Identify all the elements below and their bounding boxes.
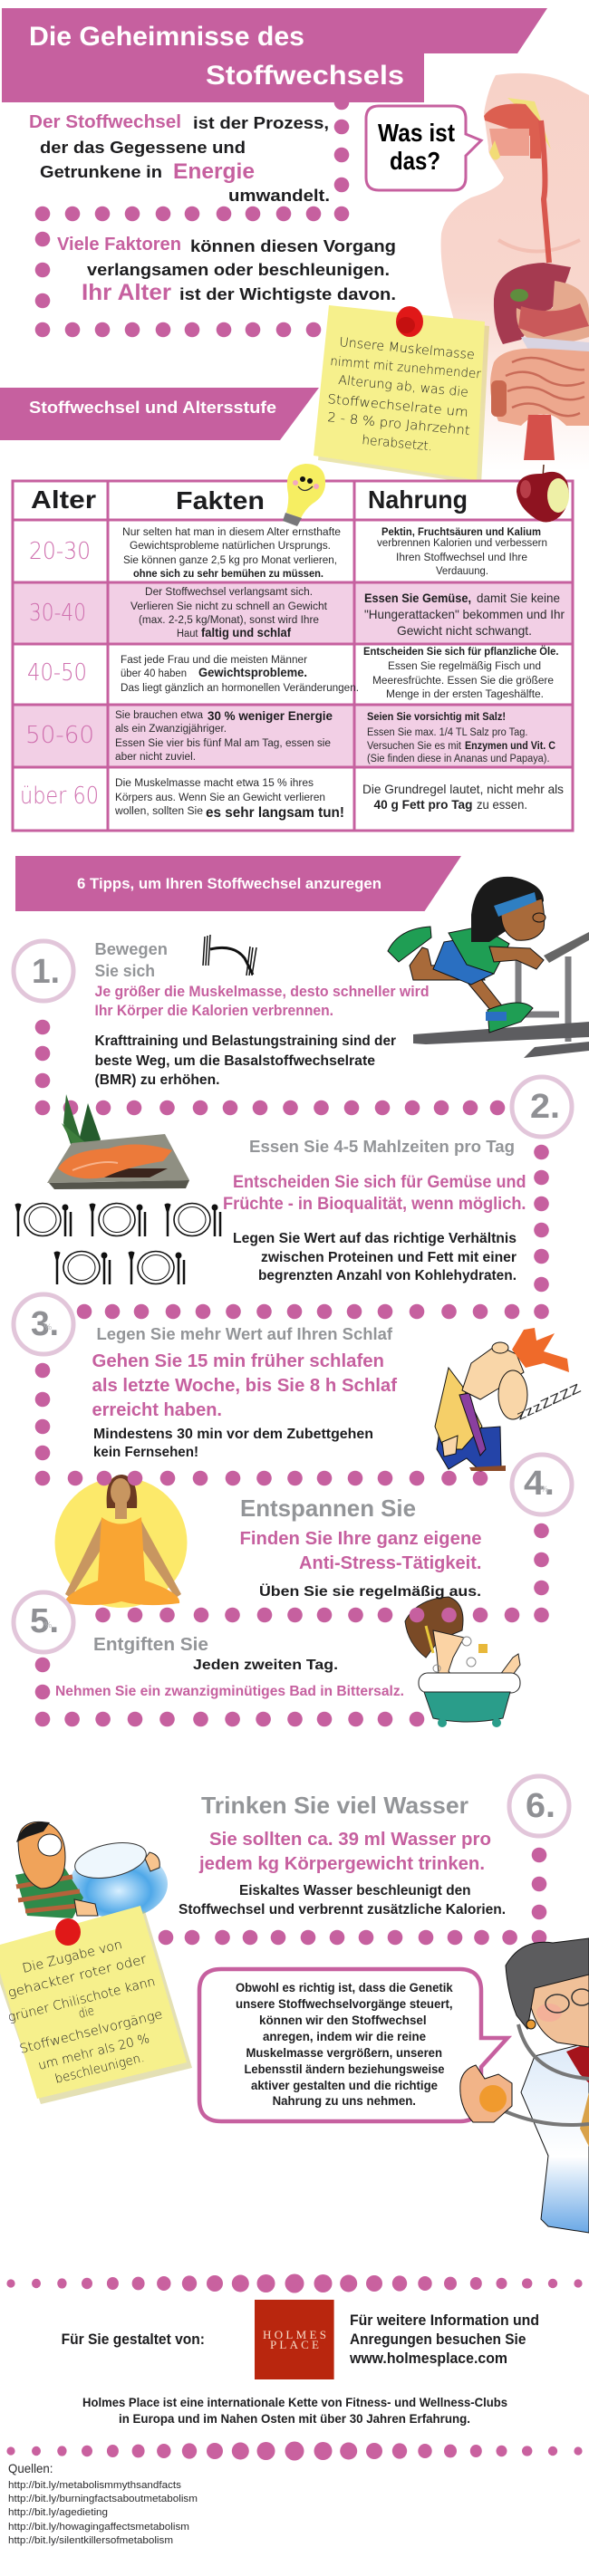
section banner: Stoffwechsel und Altersstufe — [0, 388, 319, 440]
tip 1 number badge: 1. — [32, 953, 60, 991]
title banner — [2, 8, 547, 102]
sources list: Quellen: — [8, 2461, 53, 2475]
tip 6 text — [179, 1792, 506, 1918]
tip 2 text — [223, 1138, 526, 1283]
sticky note: Muskelmasse: 2 - 8 % pro Jahrzehnt — [327, 410, 470, 438]
intro text: definition: Getrunkene in — [40, 163, 162, 181]
table row: 20-30: Nur selten hat man in diesem Alter ernsthafte — [122, 527, 341, 538]
table row: 40-50: Entscheiden Sie sich für pflanzliche Öle. — [363, 646, 558, 658]
tip 3 number badge: 3. — [31, 1305, 59, 1343]
tip 6 text: jedem kg Körpergewicht trinken. — [198, 1854, 485, 1874]
table row: 50-60: 30 % weniger Energie — [208, 708, 333, 723]
illustration: woman in bath — [405, 1597, 520, 1727]
tip 2 text: Entscheiden Sie sich für Gemüse und — [233, 1173, 526, 1192]
table row: 50-60: 50-60 — [25, 722, 94, 749]
table row: 50-60: Essen Sie vier bis fünf Mal am Tag, essen sie — [115, 738, 331, 749]
table row: 40-50: Fast jede Frau und die meisten Männer — [121, 655, 307, 666]
sticky note: Chilischote: beschleunigen. — [53, 2051, 146, 2087]
table row: 50-60: Enzymen und Vit. C — [465, 741, 555, 752]
tip 1 text: Krafttraining und Belastungstraining sind der — [94, 1033, 396, 1049]
credit: more information: www.holmesplace.com — [349, 2350, 507, 2367]
tip 1 text: Ihr Körper die Kalorien verbrennen. — [94, 1002, 333, 1019]
table row: 30-40: 30-40 — [29, 600, 86, 627]
table header row: Alter — [31, 485, 96, 514]
tip 6 text: Sie sollten ca. 39 ml Wasser pro — [209, 1830, 491, 1850]
table row: 40-50: Gewichtsprobleme. — [198, 665, 307, 679]
icon: bitten apple — [517, 465, 569, 523]
section banner: Stoffwechsel und Altersstufe: Stoffwechsel und Altersstufe — [29, 399, 276, 417]
table row: 40-50: Menge in der ersten Tageshälfte. — [386, 689, 544, 700]
intro text: factors — [57, 235, 396, 305]
logo: Holmes Place: HOLMES — [263, 2328, 326, 2341]
sticky note: Muskelmasse: nimmt mit zunehmender — [330, 354, 482, 382]
title banner: Die Geheimnisse des — [29, 22, 304, 52]
tip 4 number badge — [512, 1455, 572, 1514]
speech bubble: Was ist das?: das? — [390, 147, 440, 175]
sticky note: Chilischote: gehackter roter oder — [6, 1952, 149, 2001]
table row: 30-40: "Hungerattacken" bekommen und Ihr — [364, 607, 565, 621]
intro text: definition: Der Stoffwechsel — [29, 112, 181, 132]
tip 1 text: Bewegen — [94, 940, 168, 958]
dotted divider: top — [6, 2273, 583, 2293]
company description: in Europa und im Nahen Osten mit über 30 Jahren Erfahrung. — [119, 2411, 470, 2426]
sticky note: Muskelmasse: Unsere Muskelmasse — [339, 335, 475, 362]
sources list — [8, 2461, 198, 2546]
tip 5 text: Nehmen Sie ein zwanzigminütiges Bad in Bittersalz. — [55, 1684, 404, 1699]
tip 4 text — [239, 1495, 482, 1600]
tip 5 number badge: % — [44, 1620, 52, 1629]
table row: 30-40: faltig und schlaf — [201, 625, 291, 639]
dotted frame: intro — [35, 95, 349, 337]
tip 3 text — [92, 1325, 397, 1460]
tip 3 text: erreicht haben. — [92, 1400, 222, 1420]
sticky note: Muskelmasse: Alterung ab, was die — [338, 373, 468, 400]
table row: über 60: zu essen. — [477, 797, 527, 812]
table row: über 60: es sehr langsam tun! — [206, 805, 344, 821]
tip 4 text: Üben Sie sie regelmäßig aus. — [259, 1582, 481, 1600]
company description: Holmes Place ist eine internationale Kette von Fitness- und Wellness-Clubs — [82, 2395, 507, 2409]
table row: 20-30: Verdauung. — [436, 566, 488, 577]
sticky note: Chilischote — [0, 1906, 192, 2104]
tip 3 text: als letzte Woche, bis Sie 8 h Schlaf — [92, 1376, 397, 1396]
illustration: doctor with stethoscope — [460, 1938, 589, 2233]
intro text: factors: können diesen Vorgang — [190, 237, 396, 255]
tip 1 text: (BMR) zu erhöhen. — [94, 1072, 219, 1088]
tip 6 number badge — [509, 1776, 569, 1836]
intro text: definition: umwandelt. — [228, 187, 330, 205]
table row: 20-30: ohne sich zu sehr bemühen zu müssen. — [133, 569, 323, 580]
illustration: salmon on plate — [47, 1094, 189, 1189]
speech bubble: Genetik: Muskelmasse vergrößern, unseren — [246, 2045, 442, 2060]
illustration: human anatomy — [441, 73, 589, 471]
speech bubble: Genetik: Obwohl es richtig ist, dass die Genetik — [236, 1980, 453, 1994]
table row: 30-40: Der Stoffwechsel verlangsamt sich. — [145, 587, 313, 598]
table: Alter, Fakten, Nahrung — [13, 481, 573, 831]
tip 1 text: Je größer die Muskelmasse, desto schneller wird — [94, 983, 430, 1000]
sticky note: Muskelmasse: Stoffwechselrate um — [327, 392, 468, 420]
table row: 50-60: Sie brauchen etwa — [115, 710, 204, 721]
tip 2 text: Essen Sie 4-5 Mahlzeiten pro Tag — [249, 1138, 515, 1156]
section banner: 6 Tipps — [15, 856, 461, 911]
tip 2 number badge: 2. — [530, 1088, 560, 1126]
tip 3 text: Gehen Sie 15 min früher schlafen — [92, 1351, 384, 1371]
table row: 20-30: verbrennen Kalorien und verbessern — [377, 538, 547, 549]
table row: über 60 — [20, 778, 564, 821]
dotted path: tips 2 to 5 — [35, 1145, 549, 1726]
icon: smiling light bulb — [283, 464, 325, 526]
table row: über 60: über 60 — [20, 783, 99, 810]
table row: 20-30: Ihren Stoffwechsel und Ihre — [396, 553, 527, 563]
tip 2 text: zwischen Proteinen und Fett mit einer — [261, 1250, 517, 1265]
tip 3 number badge: % — [44, 1322, 52, 1331]
tip 1 number badge — [14, 941, 73, 1001]
tip 3 text: Mindestens 30 min vor dem Zubettgehen — [93, 1427, 373, 1442]
table row: 50-60: Seien Sie vorsichtig mit Salz! — [367, 712, 506, 723]
company description — [82, 2395, 507, 2426]
credit: more information: Für weitere Information und — [350, 2312, 539, 2329]
table row: 30-40: Verlieren Sie nicht zu schnell an Gewicht — [130, 601, 328, 612]
table row: 40-50: Das liegt gänzlich an hormonellen Veränderungen. — [121, 683, 359, 694]
table row: 50-60: aber nicht zuviel. — [115, 752, 196, 763]
speech bubble: Genetik: Lebensstil ändern beziehungsweise — [245, 2062, 445, 2076]
table row: über 60: Die Grundregel lautet, nicht mehr als — [362, 782, 564, 796]
tip 6 text: Eiskaltes Wasser beschleunigt den — [239, 1883, 471, 1898]
speech bubble: Genetik — [199, 1969, 507, 2121]
sources list: http://bit.ly/howagingaffectsmetabolism — [8, 2522, 189, 2533]
illustration: sleeping man: zzzZZZZ — [515, 1380, 584, 1423]
tip 4 text: Finden Sie Ihre ganz eigene — [239, 1529, 482, 1549]
intro text: factors: Viele Faktoren — [57, 235, 181, 255]
intro text: factors: Ihr Alter — [82, 280, 171, 305]
table row: 30-40: (max. 2-2,5 kg/Monat), sonst wird Ihre — [139, 615, 319, 626]
illustration: woman meditating — [54, 1475, 187, 1608]
tip 3 text: Legen Sie mehr Wert auf Ihren Schlaf — [96, 1325, 393, 1343]
table row: über 60: wollen, sollten Sie — [114, 806, 203, 817]
table row: 30-40: Essen Sie Gemüse, — [364, 591, 471, 605]
table row: 40-50: Meeresfrüchte. Essen Sie die größere — [372, 676, 554, 687]
table row: 50-60: (Sie finden diese in Ananas und Papaya). — [367, 754, 549, 764]
table row: 40-50 — [27, 646, 558, 700]
sticky note: Chilischote: Stoffwechselvorgänge — [18, 2007, 164, 2057]
intro text: definition — [29, 112, 330, 205]
title banner: Stoffwechsels — [206, 61, 404, 91]
table row: 40-50: über 40 haben — [121, 668, 187, 679]
section banner: 6 Tipps: 6 Tipps, um Ihren Stoffwechsel anzuregen — [77, 875, 381, 892]
tip 1 text: Sie sich — [94, 962, 155, 980]
sources list: http://bit.ly/burningfactsaboutmetabolism — [8, 2494, 198, 2504]
tip 2 text: begrenzten Anzahl von Kohlehydraten. — [258, 1268, 517, 1283]
intro text: definition: der das Gegessene und — [40, 139, 246, 157]
table header row: Nahrung — [368, 485, 468, 514]
logo: Holmes Place — [255, 2300, 334, 2379]
logo: Holmes Place: PLACE — [270, 2338, 319, 2351]
table row: 40-50: 40-50 — [27, 659, 87, 687]
credit: more information — [349, 2312, 539, 2367]
sources list: http://bit.ly/agedieting — [8, 2507, 108, 2518]
speech bubble: Genetik: können wir den Stoffwechsel — [259, 2013, 427, 2027]
tip 5 text — [55, 1635, 404, 1699]
sources list: http://bit.ly/silentkillersofmetabolism — [8, 2535, 173, 2546]
table row: 20-30: Gewichtsprobleme natürlichen Ursprungs. — [130, 541, 331, 552]
intro text: factors: ist der Wichtigste davon. — [179, 285, 396, 303]
tip 5 number badge — [14, 1592, 73, 1652]
sticky note: Chilischote: die — [77, 2004, 95, 2022]
table row: 30-40: Gewicht nicht schwangt. — [397, 623, 532, 638]
tip 3 number badge — [14, 1294, 73, 1354]
illustration: sleeping man — [435, 1328, 584, 1471]
table row: 20-30: 20-30 — [29, 538, 91, 565]
tip 5 text: Entgiften Sie — [93, 1635, 208, 1655]
sources list: http://bit.ly/metabolismmythsandfacts — [8, 2480, 182, 2491]
table row: über 60: 40 g Fett pro Tag — [373, 797, 473, 812]
credit: designed by: Für Sie gestaltet von: — [62, 2331, 205, 2348]
intro text: definition: ist der Prozess, — [193, 114, 329, 132]
tip 3 text: kein Fernsehen! — [93, 1445, 198, 1460]
sticky note: Chilischote: um mehr als 20 % — [37, 2032, 151, 2073]
icon: dumbbell — [203, 935, 256, 976]
dotted path: tip 6 — [159, 1848, 546, 1945]
tip 5 number badge: 5. — [30, 1602, 59, 1640]
tip 2 text: Früchte - in Bioqualität, wenn möglich. — [223, 1195, 526, 1214]
icon: five place settings — [15, 1203, 220, 1284]
tip 5 text: Jeden zweiten Tag. — [193, 1658, 338, 1673]
table row: 20-30: Sie können ganze 2,5 kg pro Monat verlieren, — [123, 555, 337, 566]
tip 4 text: Anti-Stress-Tätigkeit. — [299, 1553, 482, 1573]
table row: 50-60 — [25, 708, 555, 764]
tip 1 text — [94, 940, 430, 1088]
table row: über 60: Die Muskelmasse macht etwa 15 % ihres — [115, 778, 314, 789]
table row: 30-40: damit Sie keine — [477, 591, 560, 605]
table row: 20-30 — [29, 527, 547, 580]
tip 6 text: Trinken Sie viel Wasser — [201, 1792, 468, 1819]
table row: 40-50: Essen Sie regelmäßig Fisch und — [388, 661, 541, 672]
tip 4 number badge: % — [541, 1485, 548, 1494]
table row: 50-60: Versuchen Sie es mit — [367, 741, 462, 752]
table row: 30-40 — [29, 587, 565, 639]
sticky note: Muskelmasse — [314, 305, 489, 485]
table row: über 60: Körpers aus. Wenn Sie an Gewicht verlieren — [115, 793, 325, 803]
sticky note: Chilischote: Die Zugabe von — [21, 1937, 124, 1976]
table row: 30-40: Haut — [177, 629, 198, 639]
table row: 50-60: Essen Sie max. 1/4 TL Salz pro Tag. — [367, 727, 527, 738]
table header row: Fakten — [176, 486, 265, 514]
speech bubble: Was ist das?: Was ist — [378, 119, 455, 147]
speech bubble: Was ist das? — [366, 106, 481, 190]
tip 2 text: Legen Sie Wert auf das richtige Verhältnis — [233, 1231, 517, 1246]
tip 4 number badge: 4. — [524, 1465, 555, 1503]
tip 2 number badge — [512, 1077, 572, 1137]
speech bubble: Genetik: Nahrung zu uns nehmen. — [273, 2093, 416, 2108]
dotted path: tip 1 — [35, 1020, 505, 1115]
sticky note: Chilischote: grüner Chilischote kann — [6, 1975, 157, 2025]
intro text: factors: verlangsamen oder beschleunigen. — [87, 261, 390, 279]
tip 1 text: beste Weg, um die Basalstoffwechselrate — [94, 1053, 375, 1069]
credit: more information: Anregungen besuchen Sie — [350, 2331, 526, 2348]
speech bubble: Genetik: aktiver gestalten und die richtige — [251, 2078, 438, 2092]
sticky note: Muskelmasse: herabsetzt. — [362, 433, 433, 454]
illustration: woman on treadmill — [388, 877, 589, 1058]
speech bubble: Genetik: unsere Stoffwechselvorgänge steuert, — [236, 1996, 453, 2011]
dotted divider: bottom — [6, 2442, 583, 2460]
illustration: man with water bowl — [15, 1821, 168, 1918]
tip 6 number badge: 6. — [526, 1787, 555, 1825]
table row: 50-60: als ein Zwanzigjähriger. — [115, 724, 227, 735]
tip 6 text: Stoffwechsel und verbrennt zusätzliche Kalorien. — [179, 1902, 506, 1918]
intro text: definition: Energie — [173, 159, 255, 184]
table header row — [31, 485, 468, 514]
tip 4 text: Entspannen Sie — [240, 1495, 416, 1522]
speech bubble: Genetik: anregen, indem wir die reine — [263, 2029, 426, 2043]
table row: 20-30: Pektin, Fruchtsäuren und Kalium — [381, 527, 541, 538]
